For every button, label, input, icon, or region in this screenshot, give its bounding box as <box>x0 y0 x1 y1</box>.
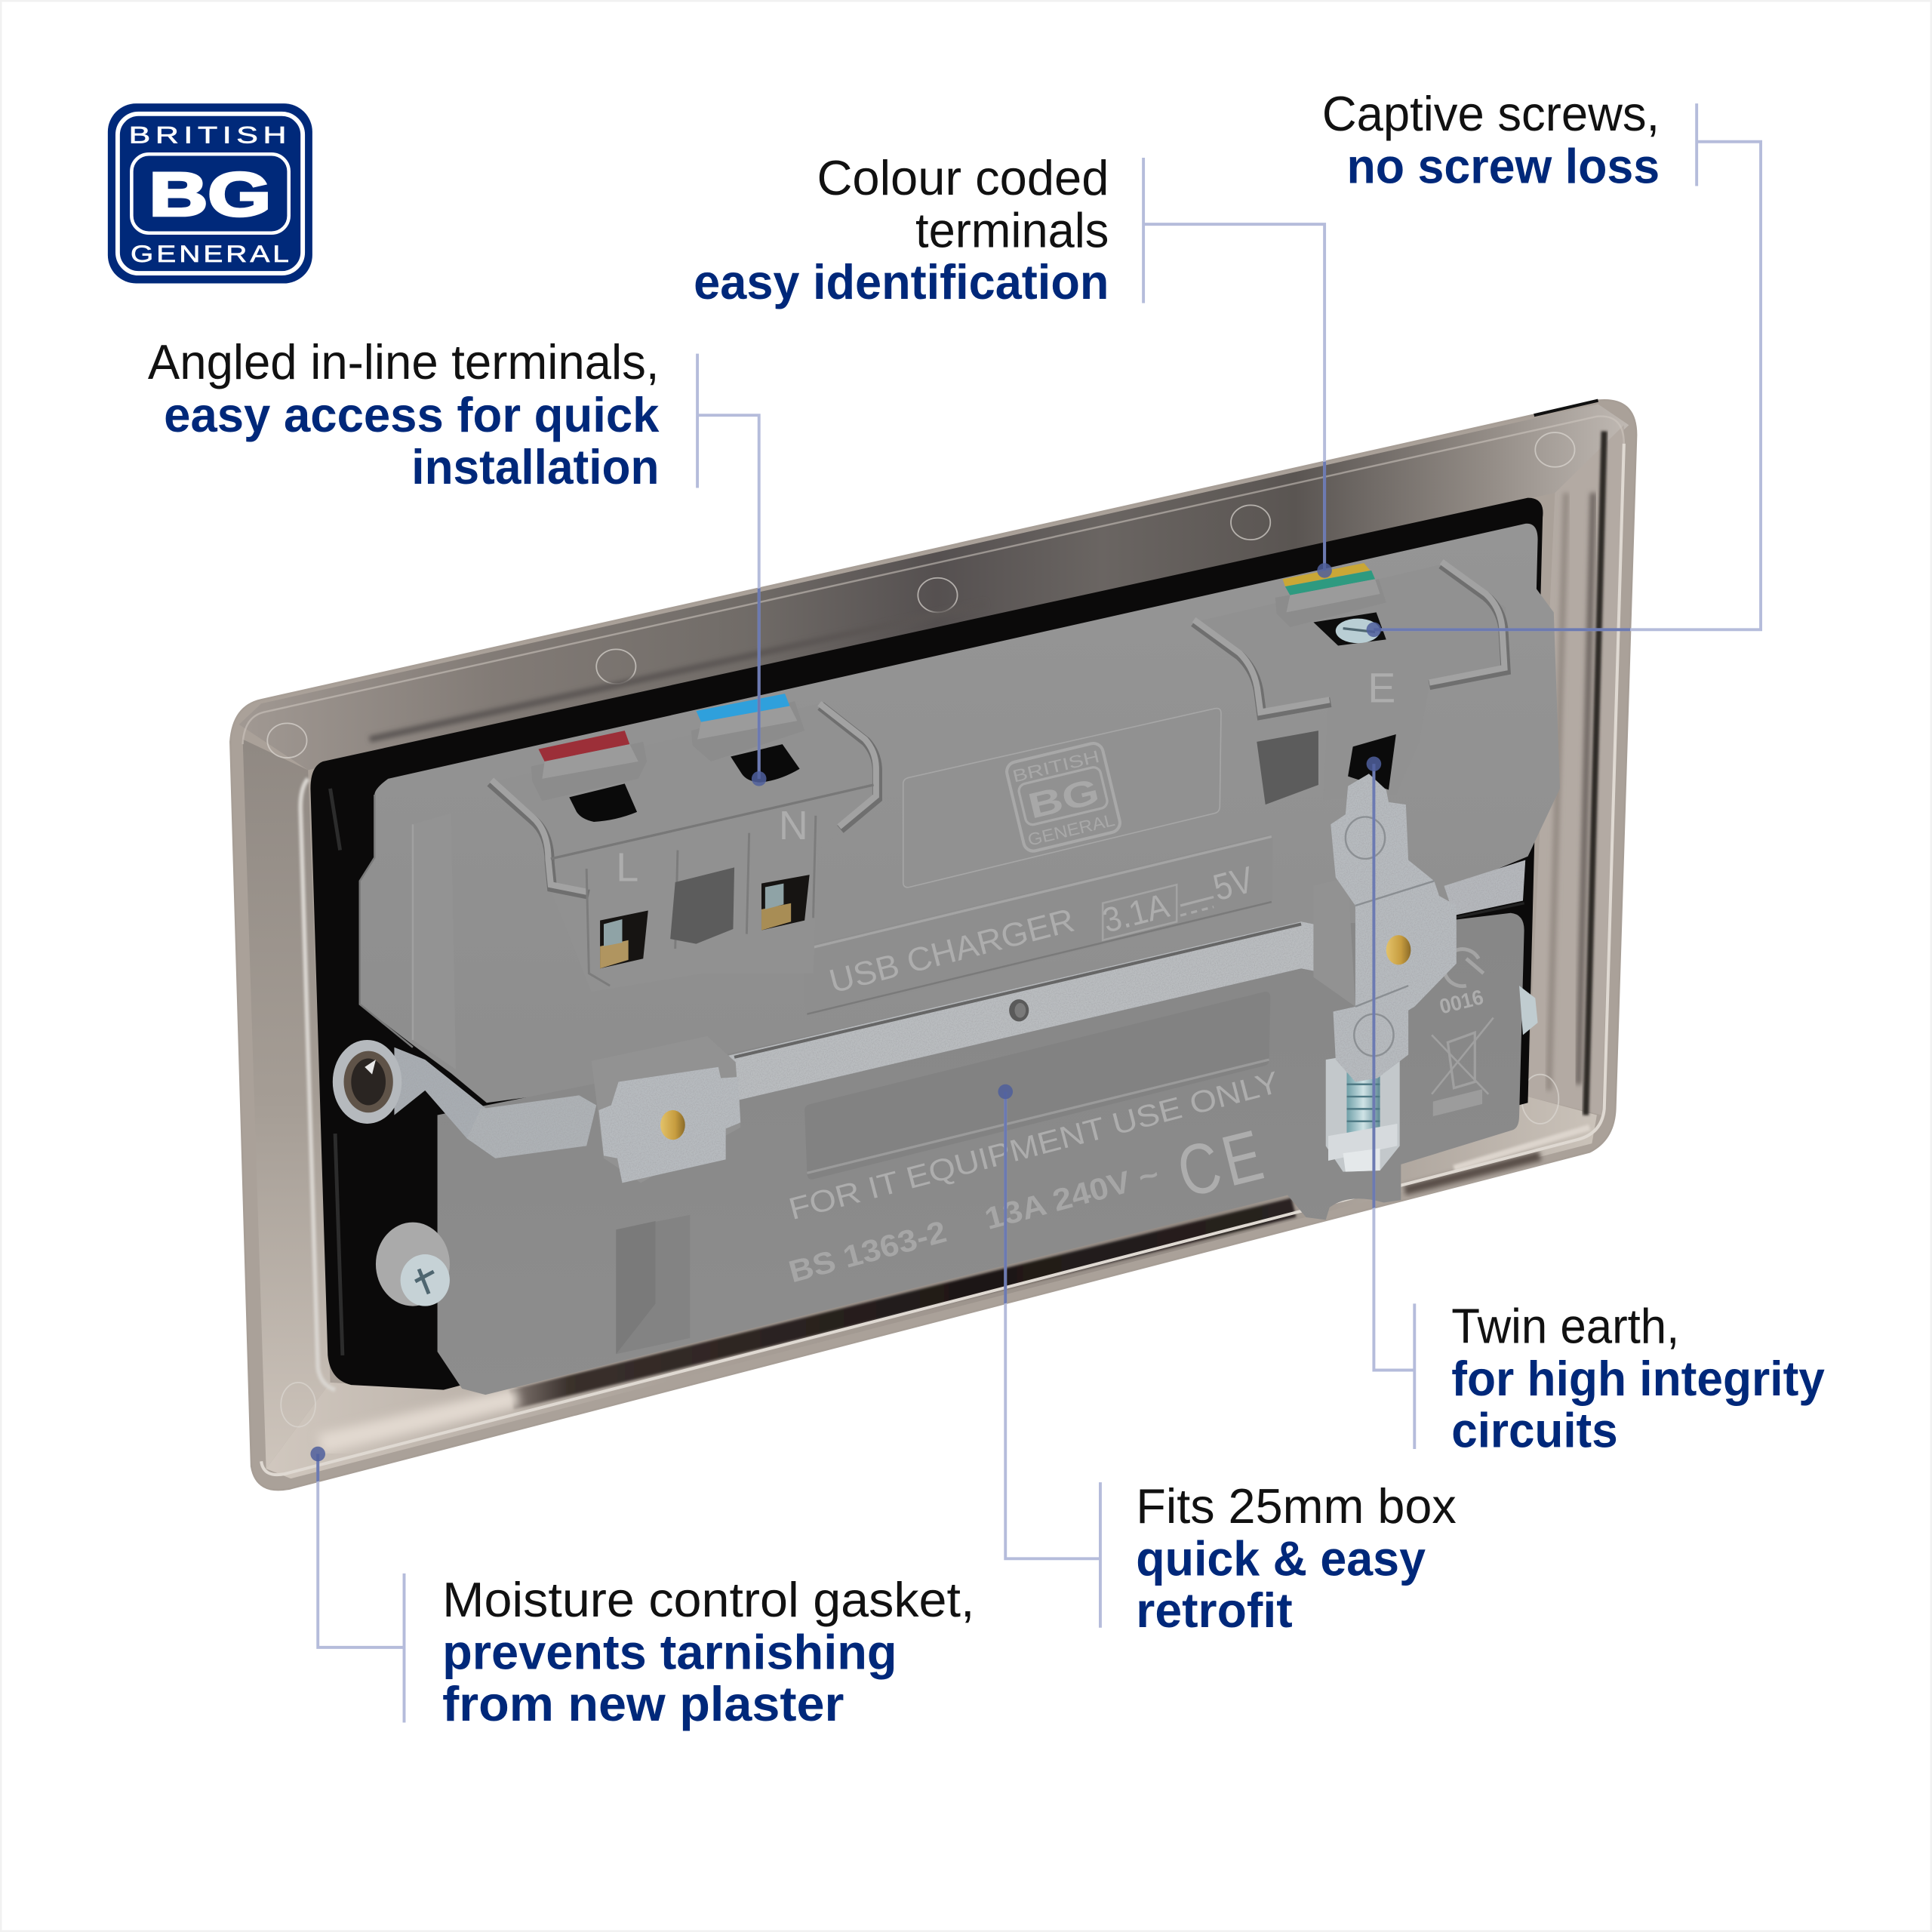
live and neutral terminals <box>491 694 877 992</box>
text: angled terminals: Angled in-line terminals, <box>148 334 659 389</box>
text: colour coded: terminals <box>915 202 1109 257</box>
leader overlays on product <box>316 461 1630 1482</box>
text: 25mm box <box>1136 1478 1457 1638</box>
USB charger panel: USB CHARGER <box>826 902 1078 1001</box>
text: twin earth: for high integrity <box>1451 1351 1825 1406</box>
earth screw assembly <box>1326 1048 1400 1172</box>
embossed BG logo: GENERAL <box>1026 810 1116 850</box>
text: angled terminals <box>148 334 660 494</box>
text: 25mm box: Fits 25mm box <box>1136 1478 1457 1534</box>
terminal window neutral <box>761 875 810 931</box>
leader: angled terminals <box>697 354 759 779</box>
right side markings <box>1432 949 1494 1116</box>
leader: colour coded <box>1143 158 1324 571</box>
black rear housing <box>300 498 1543 1390</box>
embossed BG logo: BRITISH <box>1011 746 1101 786</box>
text: captive screws: Captive screws, <box>1322 86 1660 141</box>
text: moisture gasket: Moisture control gasket, <box>442 1572 974 1627</box>
embossed BG logo: BG <box>1024 771 1103 827</box>
embossed text: rating: 13A 240V ~ <box>981 1156 1162 1236</box>
leader: moisture gasket <box>318 1454 405 1722</box>
text: twin earth <box>1451 1299 1825 1458</box>
right clip and earth tag <box>1313 774 1457 1081</box>
letter L: L <box>616 844 638 890</box>
earth hole <box>1348 734 1396 790</box>
CE mark: CE <box>1170 1114 1275 1213</box>
USB charger panel <box>804 835 1273 1017</box>
logo: British General: BG <box>149 161 271 229</box>
text: moisture gasket: prevents tarnishing <box>442 1624 897 1679</box>
right mounting screw <box>1519 986 1538 1035</box>
leader: 25mm box <box>1005 1092 1100 1628</box>
slot <box>616 1215 690 1354</box>
blank label area <box>903 709 1221 888</box>
text: colour coded: easy identification <box>694 254 1109 309</box>
text: 25mm box: quick & easy <box>1136 1531 1426 1586</box>
right side markings: 0016 <box>1437 985 1486 1018</box>
blue neutral cap <box>691 694 804 761</box>
logo: British General <box>108 103 312 284</box>
grey body lower <box>438 913 1524 1395</box>
logo: British General: BRITISH <box>129 121 291 148</box>
metal faceplate <box>230 400 1636 1490</box>
text: captive screws: no screw loss <box>1346 138 1660 193</box>
text: twin earth: Twin earth, <box>1451 1299 1679 1354</box>
lower left screw <box>376 1223 450 1306</box>
lower recessed panel <box>804 992 1270 1180</box>
earth terminal <box>1194 561 1506 804</box>
text: colour coded <box>694 150 1109 309</box>
terminal hole live <box>569 783 637 822</box>
leader: twin earth <box>1374 764 1414 1449</box>
leader: captive screws <box>1374 103 1761 629</box>
text: twin earth: circuits <box>1451 1403 1618 1458</box>
mounting ring <box>333 1040 495 1158</box>
left clip <box>467 1036 740 1183</box>
text: angled terminals: easy access for quick <box>164 387 660 442</box>
USB charger panel: 5V <box>1209 860 1258 909</box>
captive screw <box>1313 612 1386 646</box>
centre recess <box>670 867 734 944</box>
letter N: N <box>779 803 808 848</box>
text: captive screws <box>1322 86 1660 193</box>
text: 25mm box: retrofit <box>1136 1583 1293 1638</box>
embossed text: standard: BS 1363-2 <box>785 1214 950 1289</box>
embossed text: IT equipment: FOR IT EQUIPMENT USE ONLY <box>785 1065 1283 1226</box>
text: moisture gasket <box>442 1572 974 1731</box>
embossed BG logo <box>1004 741 1122 853</box>
text: angled terminals: installation <box>411 439 659 494</box>
yellow green cap <box>1275 563 1386 627</box>
text: colour coded: Colour coded <box>817 150 1109 205</box>
USB charger panel: 3.1A <box>1099 886 1173 940</box>
logo: British General: GENERAL <box>131 240 292 267</box>
dots <box>310 563 1381 1461</box>
metal strap <box>727 860 1525 1103</box>
earth recess <box>1257 731 1318 804</box>
terminal window live <box>600 911 648 968</box>
red live cap <box>531 731 647 801</box>
callout lines <box>310 103 1761 1722</box>
text: moisture gasket: from new plaster <box>442 1676 844 1731</box>
product: socket rear view <box>230 400 1636 1490</box>
grey body upper <box>360 524 1560 1103</box>
terminal hole neutral <box>731 744 800 783</box>
letter E: E <box>1367 665 1395 712</box>
